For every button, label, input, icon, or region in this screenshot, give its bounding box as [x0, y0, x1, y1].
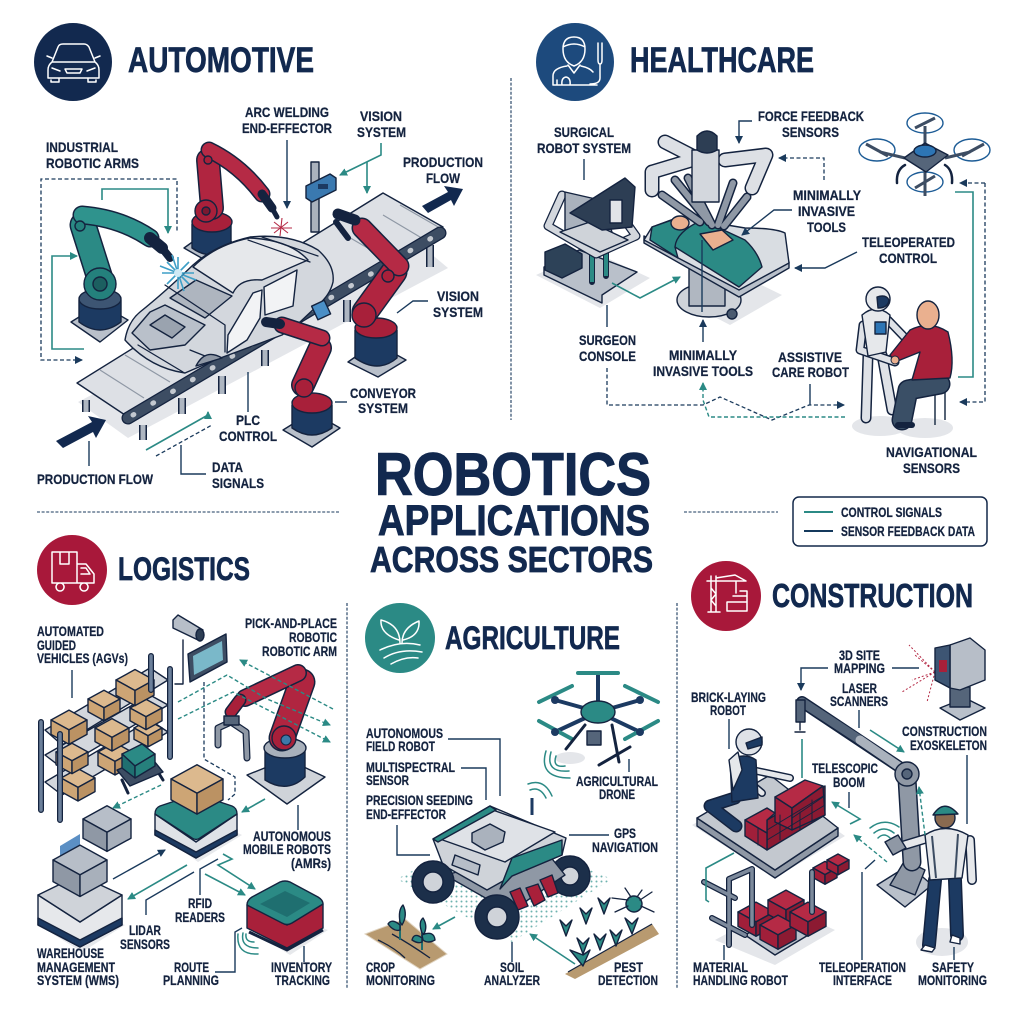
section dividers [37, 78, 778, 989]
labels: automotive: VISION [437, 288, 479, 304]
labels: healthcare: SENSORS [782, 124, 839, 140]
seeded ground [397, 830, 612, 942]
labels: logistics: AUTONOMOUS [253, 829, 331, 844]
icon: sprouting field [365, 603, 435, 673]
labels: healthcare: INVASIVE TOOLS [653, 363, 753, 379]
vision camera post [306, 162, 336, 232]
labels: automotive: DATA [212, 459, 243, 475]
heading: logistics: LOGISTICS [118, 551, 250, 587]
labels: logistics: WAREHOUSE [37, 946, 104, 961]
labels: logistics: (AMRs) [291, 856, 331, 871]
labels: automotive [37, 104, 483, 491]
labels: agriculture: DRONE [599, 787, 635, 802]
annotation lines [41, 140, 428, 474]
AMR with box [155, 765, 242, 862]
labels: automotive: INDUSTRIAL [46, 139, 118, 155]
labels: healthcare: TOOLS [807, 219, 846, 235]
labels: automotive: SIGNALS [212, 475, 264, 491]
wireless signal icon [238, 933, 258, 954]
annotation lines and signals [706, 668, 967, 960]
labels: agriculture: AGRICULTURAL [576, 774, 658, 789]
legend: SENSOR FEEDBACK DATA [841, 524, 975, 539]
red inventory robot [247, 881, 328, 955]
labels: automotive: ROBOTIC ARMS [46, 155, 139, 171]
labels: automotive: CONVEYOR [350, 385, 416, 401]
labels: automotive: END-EFFECTOR [242, 120, 332, 136]
labels: logistics: MANAGEMENT [37, 960, 116, 975]
arrows: production flow [56, 186, 463, 448]
heading: healthcare: HEALTHCARE [630, 41, 814, 80]
bricklaying platform, worker and wall [692, 729, 845, 878]
title: ACROSS SECTORS [370, 539, 653, 580]
labels: agriculture: GPS [614, 826, 636, 841]
labels: agriculture: ANALYZER [484, 973, 540, 988]
labels: agriculture: PRECISION SEEDING [366, 793, 473, 808]
labels: automotive: SYSTEM [357, 124, 406, 140]
icon: car [34, 23, 112, 101]
autonomous field robot [412, 782, 590, 939]
labels: construction: TELESCOPIC [812, 761, 878, 776]
heading: automotive: AUTOMOTIVE [128, 41, 314, 80]
labels: healthcare: MINIMALLY [793, 187, 862, 203]
labels: healthcare: ASSISTIVE [778, 349, 842, 365]
labels: logistics: SYSTEM (WMS) [37, 973, 119, 988]
legend: CONTROL SIGNALS [841, 505, 942, 520]
labels: automotive: ARC WELDING [245, 104, 329, 120]
annotation lines [72, 660, 333, 972]
labels: construction: LASER [842, 681, 877, 696]
operating table and patient [644, 216, 789, 325]
labels: healthcare: INVASIVE [798, 203, 855, 219]
labels: logistics: PLANNING [163, 973, 219, 988]
labels: agriculture: CROP [366, 960, 395, 975]
labels: healthcare: CONTROL [879, 250, 937, 266]
labels: construction: EXOSKELETON [910, 738, 987, 753]
annotation lines [584, 121, 985, 420]
red welding arm [184, 150, 277, 264]
annotation lines [397, 739, 629, 964]
labels: agriculture: END-EFFECTOR [366, 807, 446, 822]
icon: doctor [536, 23, 614, 101]
surgeon console [536, 178, 650, 308]
labels: agriculture: AUTONOMOUS [366, 726, 443, 741]
teal robot arm [71, 215, 170, 342]
panel: logistics [37, 535, 337, 988]
camera and tablet [173, 615, 227, 684]
labels: construction: BRICK-LAYING [691, 690, 766, 705]
labels: construction: SCANNERS [830, 694, 888, 709]
labels: agriculture: FIELD ROBOT [366, 739, 436, 754]
labels: logistics: ROBOTIC [289, 630, 337, 645]
laser scanner station [902, 638, 985, 720]
agricultural drone [539, 673, 658, 765]
labels: healthcare: ROBOT SYSTEM [537, 140, 631, 156]
labels: construction: MONITORING [918, 973, 987, 988]
labels: automotive: PRODUCTION [403, 154, 483, 170]
labels: automotive: PRODUCTION FLOW [37, 471, 154, 487]
pick-and-place red robotic arm [218, 673, 325, 804]
labels: agriculture: MONITORING [366, 973, 435, 988]
labels: logistics: RFID [188, 896, 212, 911]
labels: logistics: VEHICLES (AGVs) [37, 651, 128, 666]
labels: healthcare: MINIMALLY [669, 347, 738, 363]
labels: construction: BOOM [833, 775, 865, 790]
labels: healthcare: SENSORS [903, 460, 960, 476]
panel: construction [691, 561, 987, 988]
conveyor system [77, 193, 448, 440]
labels: construction: HANDLING ROBOT [693, 973, 789, 988]
labels: logistics: ROBOTIC ARM [262, 644, 337, 659]
labels: logistics: SENSORS [120, 937, 170, 952]
labels: healthcare: FORCE FEEDBACK [758, 108, 864, 124]
labels: healthcare: NAVIGATIONAL [886, 444, 977, 460]
assistive care robot and patient [852, 287, 953, 438]
labels: logistics [37, 616, 337, 988]
title: APPLICATIONS [378, 497, 650, 545]
legend [793, 497, 987, 546]
warehouse shelves with boxes [41, 656, 170, 820]
labels: automotive: CONTROL [219, 428, 277, 444]
labels: construction: MATERIAL [693, 960, 748, 975]
labels: construction: TELEOPERATION [819, 960, 906, 975]
labels: logistics: PICK-AND-PLACE [245, 616, 337, 631]
labels: automotive: SYSTEM [433, 304, 483, 320]
crop monitoring soil patch [365, 905, 447, 969]
labels: healthcare: CARE ROBOT [772, 364, 849, 380]
exoskeleton worker [885, 806, 972, 956]
material handling forklift robot [704, 869, 835, 965]
labels: healthcare: CONSOLE [579, 348, 636, 364]
labels: agriculture [366, 726, 658, 988]
panel: automotive [34, 23, 483, 491]
labels: automotive: FLOW [426, 170, 461, 186]
labels: logistics: GUIDED [37, 638, 76, 653]
labels: logistics: READERS [175, 910, 225, 925]
grey parcel [60, 806, 131, 857]
weld sparks [160, 218, 292, 291]
labels: logistics: INVENTORY [271, 960, 332, 975]
labels: logistics: TRACKING [275, 973, 330, 988]
small AGV robot [117, 744, 163, 793]
labels: automotive: VISION [360, 108, 402, 124]
surgical robot arms [652, 131, 766, 226]
labels: healthcare: SURGICAL [554, 124, 614, 140]
telescopic boom crane [795, 700, 932, 907]
panel: healthcare [536, 23, 990, 476]
labels: construction: MAPPING [834, 661, 885, 676]
labels: construction: 3D SITE [839, 648, 880, 663]
labels: agriculture: SOIL [500, 960, 524, 975]
warehouse management system robot [38, 845, 125, 952]
labels: agriculture: NAVIGATION [592, 840, 658, 855]
title [370, 441, 653, 580]
quadcopter drone [859, 113, 990, 196]
car body [125, 236, 333, 373]
right red robot arm [312, 214, 406, 377]
labels: healthcare [537, 108, 977, 476]
panel: agriculture [365, 603, 659, 988]
labels: logistics: AUTOMATED [37, 624, 104, 639]
labels: healthcare: TELEOPERATED [862, 234, 955, 250]
labels: agriculture: MULTISPECTRAL [366, 760, 455, 775]
heading: agriculture: AGRICULTURE [445, 620, 620, 656]
wireless signal icons [544, 751, 570, 778]
title: ROBOTICS [375, 441, 651, 508]
pest detection crop row [560, 888, 659, 979]
labels: logistics: ROUTE [174, 960, 209, 975]
labels: construction [691, 648, 987, 988]
labels: automotive: SYSTEM [358, 400, 408, 416]
lower red robot arm [266, 322, 340, 447]
icon: crane and bricks [691, 561, 761, 631]
labels: healthcare: SURGEON [579, 332, 636, 348]
labels: construction: ROBOT [710, 703, 747, 718]
labels: construction: CONSTRUCTION [902, 724, 987, 739]
labels: agriculture: DETECTION [598, 973, 658, 988]
loose bricks [813, 854, 849, 884]
labels: logistics: LIDAR [129, 923, 161, 938]
labels: logistics: MOBILE ROBOTS [243, 842, 331, 857]
icon: delivery truck [37, 535, 107, 605]
labels: construction: INTERFACE [833, 973, 892, 988]
labels: agriculture: PEST [614, 960, 644, 975]
labels: construction: SAFETY [932, 960, 974, 975]
labels: automotive: PLC [236, 412, 260, 428]
labels: agriculture: SENSOR [366, 773, 409, 788]
